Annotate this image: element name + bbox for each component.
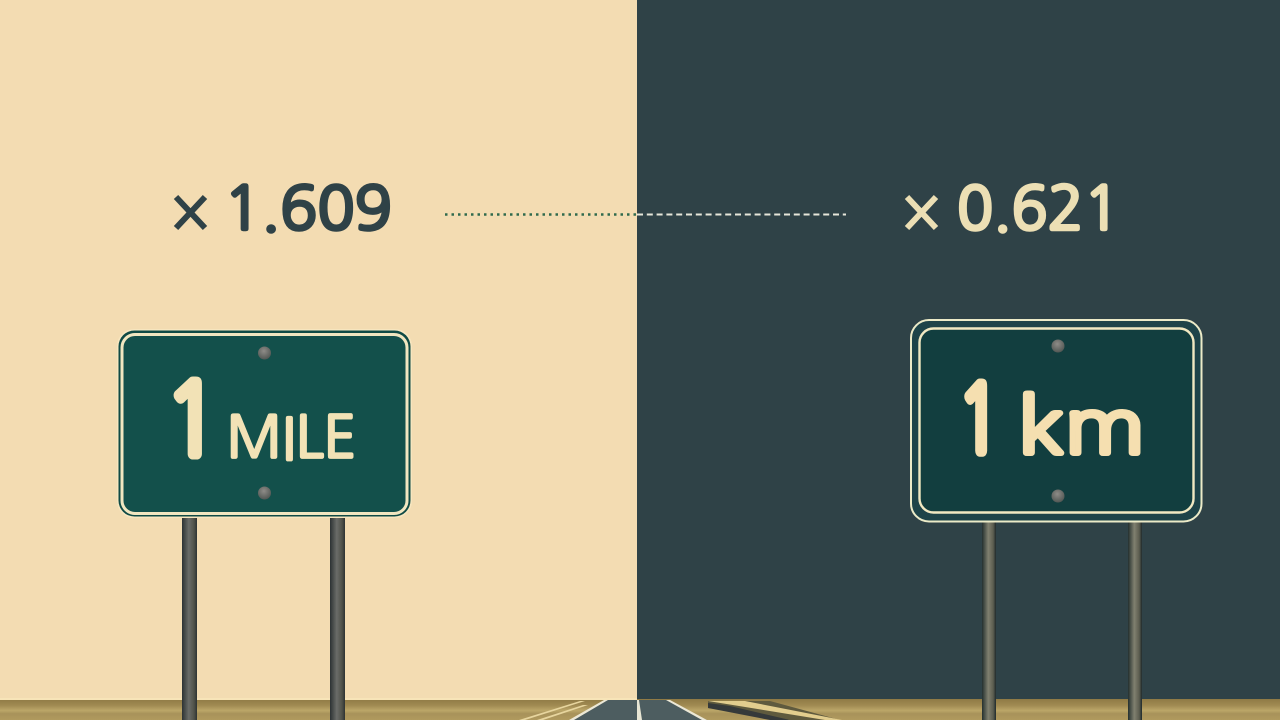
sign posts: km: [982, 520, 1142, 720]
right road shoulder: [708, 701, 840, 720]
bolt top: [258, 346, 271, 360]
number 1: 1: [958, 374, 1000, 466]
multiplier: times 0.621: [907, 180, 1120, 238]
bolt bottom: [258, 486, 271, 500]
dotted connector line: [445, 213, 846, 216]
value 0.621: 0.621: [957, 180, 1120, 238]
value 1.609: 1.609: [224, 180, 392, 238]
unit km: km: [1018, 388, 1146, 464]
bolt top: [1052, 340, 1064, 352]
ground strip: [0, 698, 1280, 720]
multiply sign: [907, 197, 936, 228]
multiplier: times 1.609: [176, 180, 392, 238]
road right edge line: [666, 700, 707, 720]
bolt bottom: [1052, 490, 1064, 502]
number 1: 1: [165, 370, 219, 470]
sign: 1 km: [911, 320, 1202, 522]
sign posts: mile: [182, 516, 345, 720]
road surface: [570, 700, 707, 720]
multiply sign: [176, 197, 205, 228]
sign: 1 mile: [117, 329, 412, 518]
road left edge line: [569, 700, 608, 720]
unit MILE: MILE: [226, 408, 356, 466]
left road shoulder lines: [519, 701, 585, 720]
road centre line: [637, 700, 642, 720]
panel: kilometres (dark background): [637, 0, 1280, 720]
panel: miles (cream background): [0, 0, 637, 720]
